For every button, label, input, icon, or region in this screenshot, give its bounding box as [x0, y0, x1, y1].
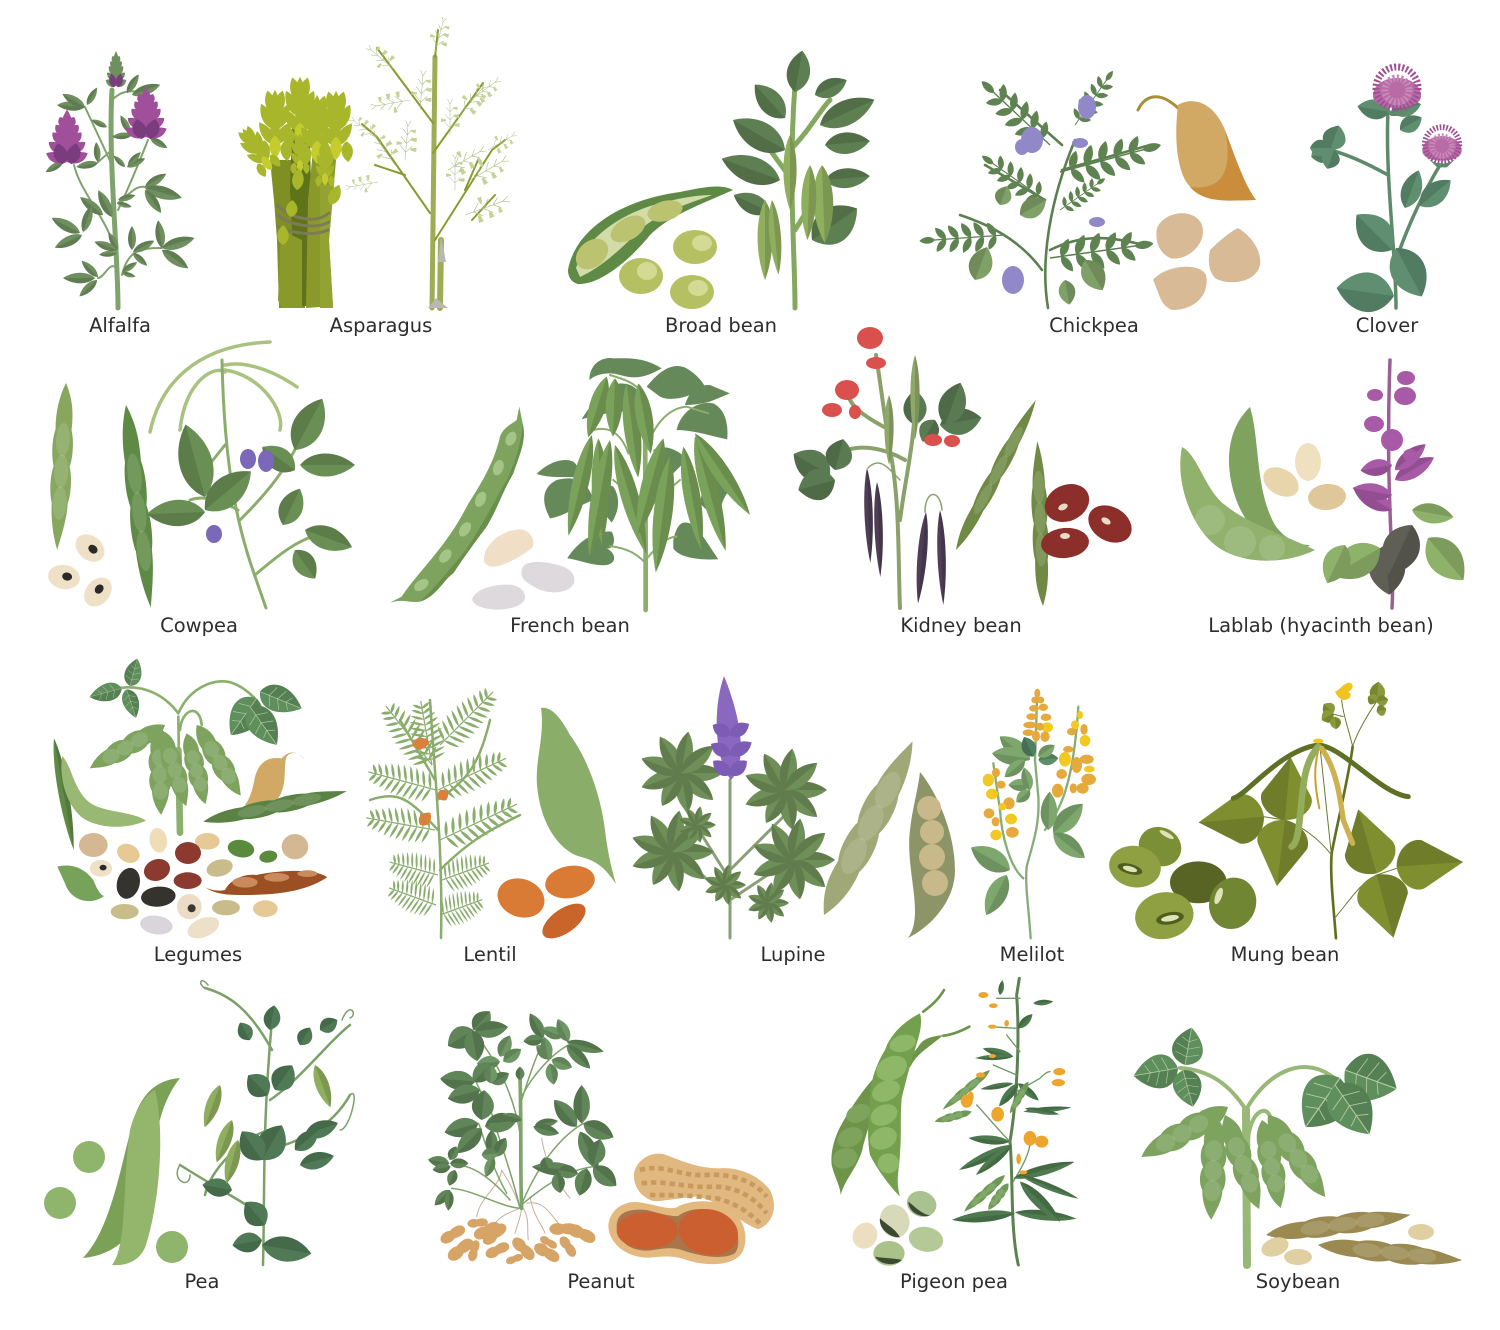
asparagus bundle [230, 76, 356, 308]
label: Lentil: Lentil [463, 943, 517, 966]
panel: Peanut [427, 1006, 774, 1293]
label: Soybean: Soybean [1256, 1270, 1340, 1293]
alfalfa stems [74, 90, 162, 308]
pigeon pea seeds [848, 1187, 945, 1266]
peas [44, 1141, 188, 1263]
pigeon pea pods [830, 990, 969, 1197]
open pod [568, 186, 733, 284]
label: Kidney bean: Kidney bean [900, 614, 1022, 637]
chickpeas [1153, 213, 1260, 310]
lablab pods [1180, 407, 1315, 561]
soybean plant [1131, 1025, 1405, 1265]
panel: Kidney bean [786, 327, 1138, 637]
peanut roots [477, 1138, 570, 1240]
alfalfa leaves [44, 72, 196, 299]
panel: Chickpea [918, 64, 1260, 337]
peanut stems [520, 1077, 522, 1208]
panel: Pea [44, 981, 354, 1293]
label: Peanut: Peanut [567, 1270, 635, 1293]
open peanut [608, 1201, 745, 1264]
clover leaves [1308, 96, 1458, 316]
peanut leaves [427, 1006, 622, 1211]
chickpea pod [1138, 97, 1256, 201]
label: Pigeon pea: Pigeon pea [900, 1270, 1008, 1293]
label: Melilot: Melilot [1000, 943, 1065, 966]
label: Broad bean: Broad bean [665, 314, 777, 337]
label: Chickpea: Chickpea [1049, 314, 1139, 337]
panel: French bean [390, 358, 757, 637]
label: Lablab: Lablab (hyacinth bean) [1208, 614, 1434, 637]
pea plant [177, 981, 354, 1266]
melilot flowers [983, 689, 1096, 840]
closed peanut [634, 1154, 774, 1229]
lablab plant [1315, 360, 1476, 608]
lupine pods [810, 734, 955, 938]
soybean pods and seeds [1259, 1205, 1463, 1270]
label: Mung bean: Mung bean [1231, 943, 1339, 966]
pigeon pea plant [934, 978, 1080, 1265]
mung beans [1106, 820, 1263, 944]
chickpea plant [918, 64, 1166, 308]
panel: Alfalfa [43, 51, 196, 337]
panel: Melilot [966, 689, 1096, 966]
melilot leaves [966, 729, 1090, 920]
lupine plant [630, 676, 835, 938]
label: Pea: Pea [184, 1270, 220, 1293]
kidney beans [1039, 477, 1138, 560]
label: Clover: Clover [1356, 314, 1419, 337]
panel: Mung bean [1106, 681, 1465, 966]
broad bean plant [717, 49, 880, 308]
panel: Legumes [49, 656, 348, 966]
french bean seeds [472, 529, 574, 610]
peanuts in soil [438, 1218, 598, 1266]
panel: Asparagus [230, 15, 520, 337]
kidney bean plant [786, 327, 984, 608]
lentil pod [537, 708, 616, 884]
panel: Clover [1308, 67, 1462, 337]
melilot stems [993, 690, 1078, 938]
label: French bean: French bean [510, 614, 630, 637]
asparagus fern [345, 15, 520, 308]
alfalfa flowers [43, 51, 170, 167]
beans [619, 230, 717, 309]
lentil plant [363, 680, 524, 938]
cowpea plant [147, 342, 356, 608]
lablab seeds [1258, 443, 1347, 512]
pea pods [83, 1078, 180, 1265]
label: Alfalfa: Alfalfa [89, 314, 151, 337]
clover flowers [1373, 67, 1462, 167]
french bean plant [537, 358, 757, 610]
cowpea seeds [46, 529, 117, 612]
panel: Lupine [630, 676, 955, 966]
mung bean plant [1196, 681, 1465, 944]
panel: Pigeon pea [830, 978, 1080, 1293]
panel: Cowpea [46, 342, 356, 637]
panel: Lablab [1180, 360, 1476, 637]
label: Cowpea: Cowpea [160, 614, 238, 637]
panel: Broad bean [568, 49, 880, 337]
label: Asparagus: Asparagus [330, 314, 432, 337]
panel: Lentil [363, 680, 616, 966]
label: Legumes: Legumes [154, 943, 242, 966]
french bean pod [390, 407, 524, 603]
lentils [492, 862, 597, 945]
clover stems [1330, 110, 1440, 308]
label: Lupine: Lupine [760, 943, 826, 966]
cowpea pods [47, 382, 161, 609]
legumes illustration (scaled group) [49, 656, 348, 943]
panel: Soybean [1131, 1025, 1463, 1293]
green pods [949, 396, 1051, 606]
